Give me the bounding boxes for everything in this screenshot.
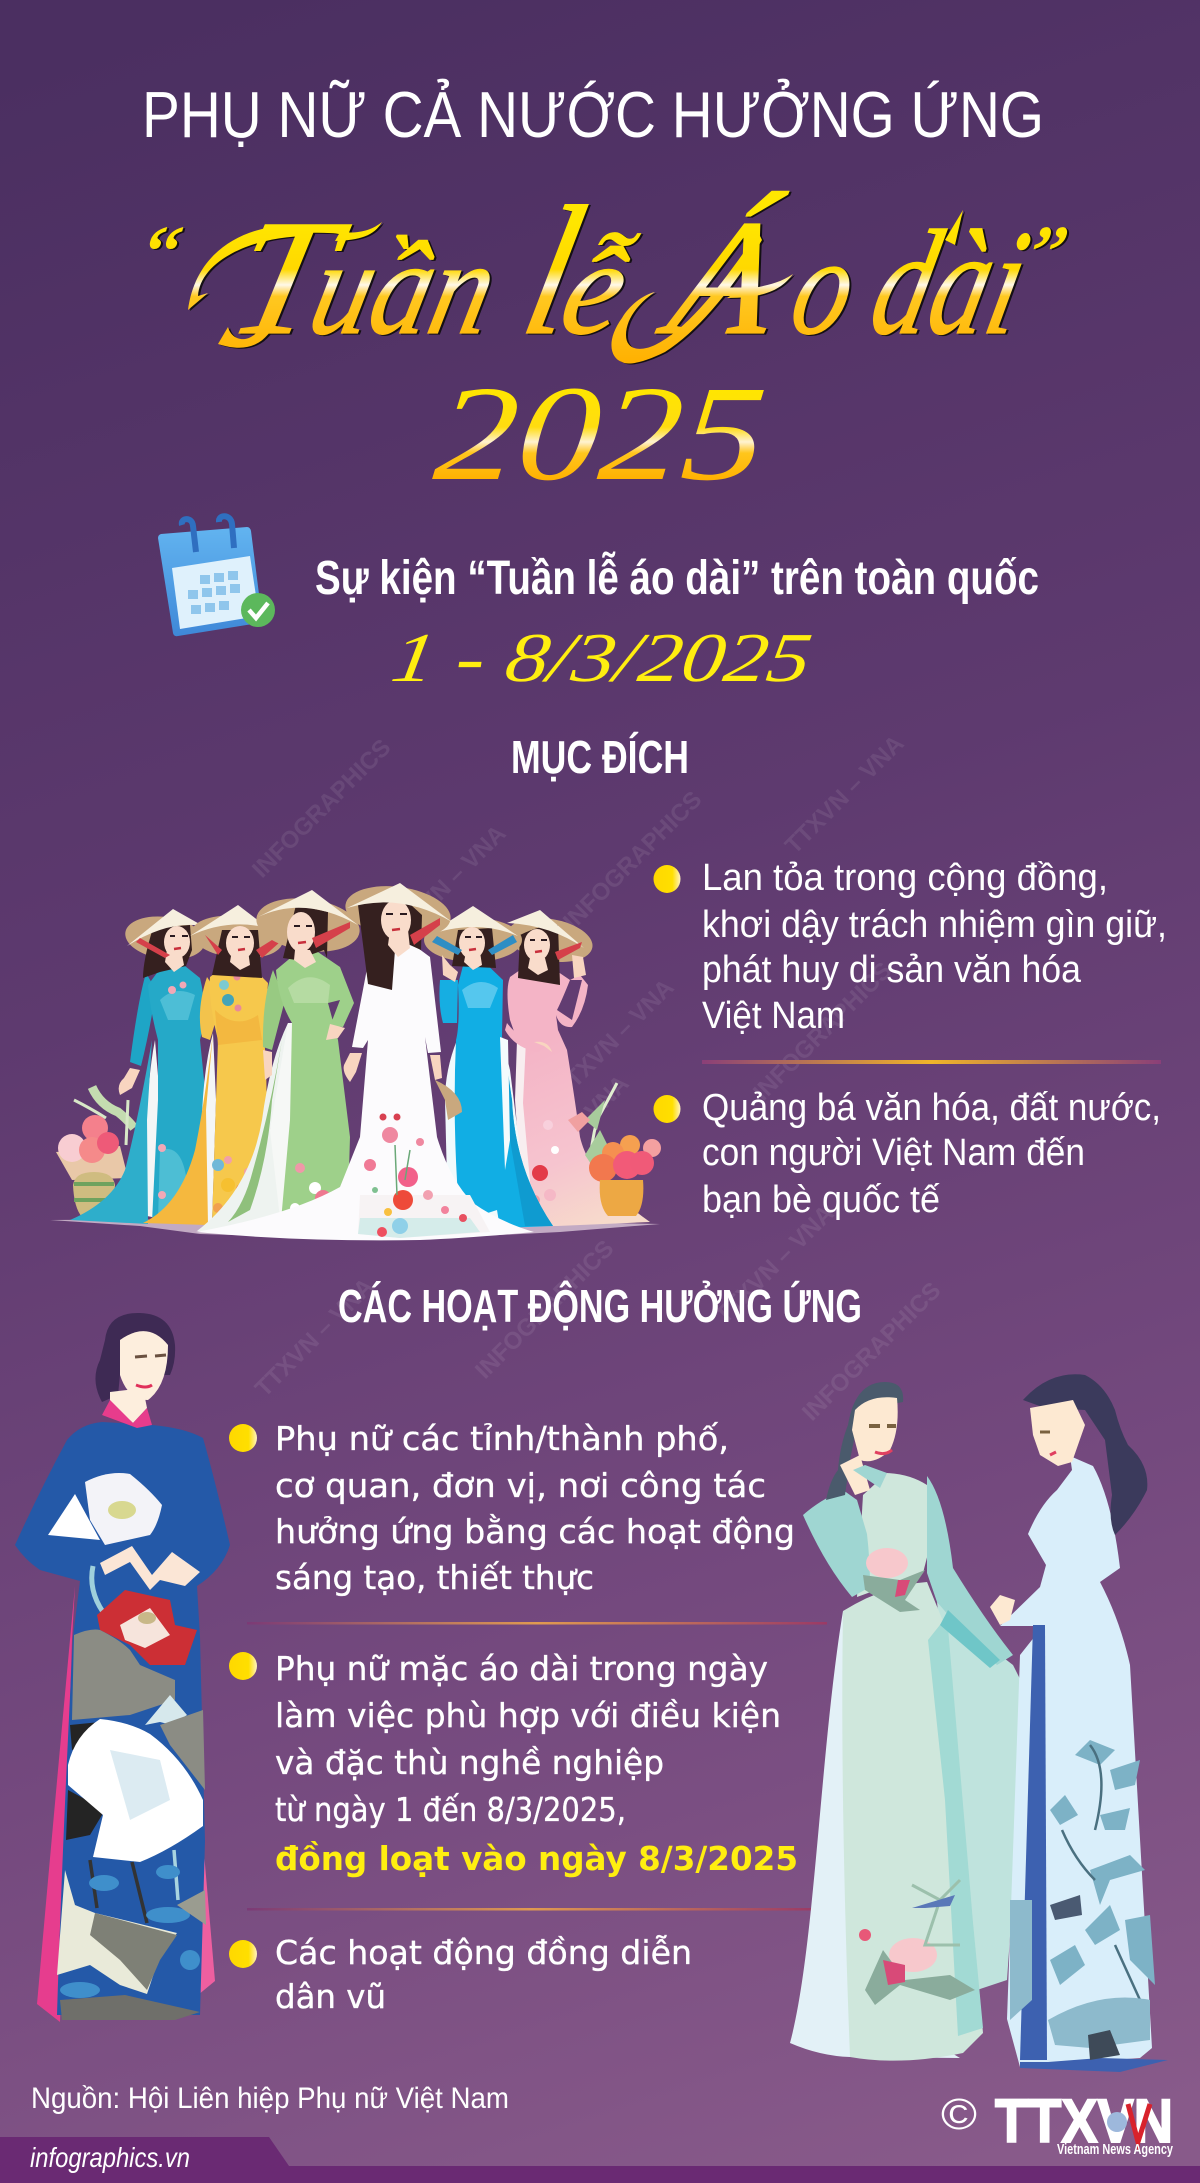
swash ornaments on T and A: [188, 210, 963, 364]
title script: Tuần lễ Áo dài: [109, 168, 1086, 373]
woman in turquoise: [70, 909, 208, 1224]
watermarks: INFOGRAPHICS: [797, 1277, 946, 1426]
event line: Sự kiện “Tuần lễ áo dài” trên toàn quốc: [315, 551, 1039, 605]
watermarks: TTXVN – VNA: [382, 820, 511, 949]
title script: Tuần lễ Áo dài: ”: [1011, 210, 1076, 299]
watermarks: INFOGRAPHICS: [247, 734, 396, 883]
activity item 2: Phụ nữ mặc áo dài trong ngày: [275, 1650, 768, 1688]
crane: [68, 1719, 203, 1923]
purpose item 2: [654, 1087, 1161, 1221]
watermarks: TTXVN – VNA: [710, 1200, 839, 1329]
purpose item 2: bạn bè quốc tế: [702, 1179, 940, 1221]
title script: Tuần lễ Áo dài: o: [779, 209, 871, 364]
illustration: woman in blue ao dai with lotus and crane: [15, 1313, 230, 2022]
event date: 1 - 8/3/2025: [386, 619, 817, 697]
purpose item 1: khơi dậy trách nhiệm gìn giữ,: [702, 904, 1167, 946]
illustration: six women in ao dai with flowers: [50, 880, 661, 1240]
flower pot left: [56, 1087, 134, 1217]
purpose item 1: Lan tỏa trong cộng đồng,: [702, 857, 1108, 899]
activity item 2: đồng loạt vào ngày 8/3/2025: [275, 1840, 798, 1878]
title script: Tuần lễ Áo dài: Á: [646, 187, 799, 370]
title script: Tuần lễ Áo dài: “: [126, 210, 191, 299]
title year 2025: 2025: [429, 359, 771, 509]
website: infographics.vn: [30, 2142, 190, 2173]
purpose item 1: Việt Nam: [702, 995, 845, 1037]
purpose item 2: Quảng bá văn hóa, đất nước,: [702, 1087, 1161, 1129]
activity item 2: và đặc thù nghề nghiệp: [275, 1744, 664, 1782]
footer band: [0, 2137, 1200, 2183]
activity item 3: dân vũ: [275, 1978, 386, 2016]
heading: activities: CÁC HOẠT ĐỘNG HƯỞNG ỨNG: [338, 1280, 862, 1332]
activity item 2: [229, 1650, 798, 1878]
watermarks: [247, 730, 946, 1426]
lotus red: [97, 1590, 197, 1665]
title script: Tuần lễ Áo dài: ễ: [549, 213, 646, 363]
watermarks: INFOGRAPHICS: [558, 786, 707, 935]
purpose item 2: con người Việt Nam đến: [702, 1132, 1085, 1174]
logo: TTXVN: TTXVN: [995, 2087, 1173, 2155]
title script: Tuần lễ Áo dài: l: [509, 168, 600, 373]
source: Nguồn: Hội Liên hiệp Phụ nữ Việt Nam: [31, 2082, 509, 2115]
illustration: woman in light blue ao dai: [990, 1374, 1168, 2072]
activity item 2: từ ngày 1 đến 8/3/2025,: [275, 1791, 626, 1829]
purpose item 1: [654, 857, 1167, 1037]
activity item 1: hưởng ứng bằng các hoạt động: [275, 1513, 795, 1551]
activity item 1: sáng tạo, thiết thực: [275, 1559, 594, 1597]
activity item 1: cơ quan, đơn vị, nơi công tác: [275, 1467, 766, 1505]
activity item 3: Các hoạt động đồng diễn: [275, 1934, 692, 1972]
illustration: woman in mint ao dai: [790, 1382, 1020, 2061]
watermarks: INFOGRAPHICS: [470, 1235, 619, 1384]
title line: PHỤ NỮ CẢ NƯỚC HƯỞNG ỨNG: [142, 78, 1044, 151]
icon: calendar: [158, 516, 275, 636]
lotus leaves: [72, 1630, 175, 1720]
woman in green: [197, 890, 363, 1236]
activity item 1: [229, 1420, 795, 1597]
copyright mark: ©: [941, 2090, 977, 2139]
purpose item 1: phát huy di sản văn hóa: [702, 949, 1082, 991]
title script: Tuần lễ Áo dài: uần: [298, 213, 511, 363]
activity item 3: [229, 1934, 692, 2016]
hands: [100, 1546, 200, 1590]
flower pot right: [568, 1083, 661, 1216]
activity item 1: Phụ nữ các tỉnh/thành phố,: [275, 1420, 729, 1458]
title script: Tuần lễ Áo dài: T: [217, 187, 360, 370]
woman in white: [196, 880, 534, 1240]
watermarks: TTXVN – VNA: [780, 730, 909, 859]
watermarks: TTXVN – VNA: [550, 974, 679, 1103]
woman in blue: [424, 906, 553, 1228]
watermarks: TTXVN – VNA: [250, 1273, 379, 1402]
watermarks: TTXVN – VNA: [505, 1070, 634, 1199]
watermarks: INFOGRAPHICS: [748, 957, 897, 1106]
heading: purpose: MỤC ĐÍCH: [511, 731, 689, 783]
woman in pink: [504, 910, 650, 1226]
activity item 2: làm việc phù hợp với điều kiện: [275, 1697, 781, 1735]
lotus white: [48, 1473, 162, 1612]
woman in yellow: [143, 905, 285, 1225]
title script: Tuần lễ Áo dài: dài: [858, 200, 1043, 366]
